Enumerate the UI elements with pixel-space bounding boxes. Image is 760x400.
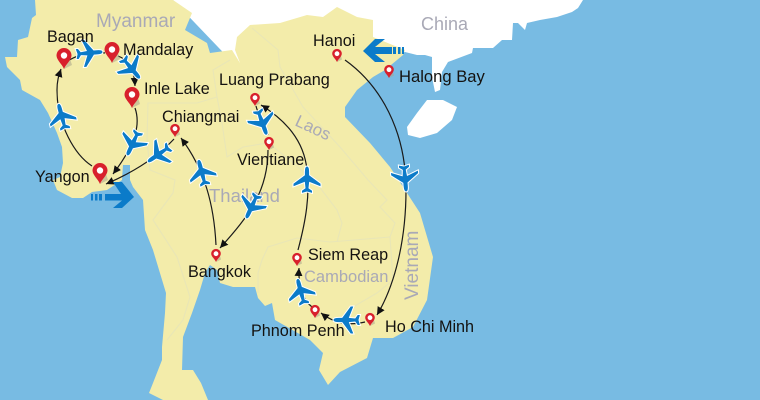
label: Mandalay: Mandalay: [123, 41, 194, 59]
label: Cambodian: Cambodian: [304, 268, 388, 286]
pin: Chiangmai: [170, 124, 180, 137]
route: Hanoi to Ho Chi Minh: [345, 60, 406, 315]
icon: plane Vientiane-Bangkok: [233, 188, 270, 225]
label: Inle Lake: Inle Lake: [144, 80, 210, 98]
pin: Siem Reap: [292, 253, 302, 266]
label: Ho Chi Minh: Ho Chi Minh: [385, 318, 474, 336]
pin: Yangon: [92, 163, 108, 184]
icon: plane Bangkok-Chiangmai: [185, 156, 219, 190]
route: Mandalay to Inle Lake: [118, 56, 135, 86]
map pins: [56, 42, 394, 326]
icon: plane Inle-Yangon: [114, 125, 151, 162]
icon: plane Chiangmai-Yangon: [140, 135, 178, 173]
icon: plane Yangon-Bagan: [45, 100, 79, 134]
icon: plane Vientiane-Luang Prabang: [244, 105, 280, 140]
label: Chiangmai: Chiangmai: [162, 108, 239, 126]
pin: Bagan: [56, 48, 72, 69]
pin: Ho Chi Minh: [365, 313, 375, 326]
Hainan island: [407, 100, 457, 138]
icon: plane Bagan-Mandalay: [74, 38, 104, 68]
label: Halong Bay: Halong Bay: [399, 67, 485, 86]
flight routes: [57, 52, 406, 324]
pin: Luang Prabang: [250, 93, 260, 106]
arrow: departure from Yangon: [91, 182, 134, 208]
route: Luang Prabang to Vientiane: [256, 106, 268, 135]
pin: Mandalay: [104, 42, 120, 63]
route: Phnom Penh to Siem Reap: [299, 268, 312, 307]
pin: Halong Bay: [384, 65, 394, 78]
mainland Southeast Asia: [5, 0, 433, 400]
icon: plane Siem Reap-Luang Prabang: [293, 166, 321, 194]
China landmass: [173, 0, 583, 92]
icon: plane Mandalay-Inle: [112, 49, 151, 88]
pin: Phnom Penh: [310, 305, 320, 318]
country labels: [96, 11, 469, 300]
label: Vietnam: Vietnam: [402, 231, 423, 300]
route: Bagan to Mandalay: [66, 52, 105, 62]
label: Yangon: Yangon: [35, 168, 90, 186]
pin: Bangkok: [211, 249, 221, 262]
route: Ho Chi Minh to Phnom Penh: [321, 313, 365, 324]
planes: [45, 38, 420, 334]
route: Bangkok to Chiangmai: [181, 138, 216, 245]
label: Laos: Laos: [292, 111, 334, 144]
route: Siem Reap to Luang Prabang: [261, 105, 308, 250]
icon: plane Hanoi-Ho Chi Minh: [390, 163, 420, 193]
label: Vientiane: Vientiane: [237, 151, 304, 169]
pin: Hanoi: [332, 49, 342, 62]
route: Vientiane to Bangkok: [220, 150, 268, 248]
label: Luang Prabang: Luang Prabang: [219, 71, 330, 89]
route: Inle Lake to Yangon: [113, 108, 137, 174]
arrow: arrival at Hanoi: [363, 39, 404, 62]
label: Myanmar: Myanmar: [96, 11, 176, 32]
label: Phnom Penh: Phnom Penh: [251, 322, 345, 340]
icon: plane Ho Chi Minh-Phnom Penh: [333, 306, 360, 334]
route: Yangon to Bagan: [57, 69, 92, 166]
label: Bagan: Bagan: [47, 28, 94, 46]
route: Chiangmai to Yangon: [106, 139, 174, 184]
icon: plane Phnom Penh-Siem Reap: [284, 275, 318, 309]
label: China: China: [421, 14, 469, 34]
label: Thailand: Thailand: [209, 185, 280, 206]
pin: Inle Lake: [124, 87, 140, 108]
label: Bangkok: Bangkok: [188, 263, 252, 281]
city labels: [35, 28, 485, 340]
label: Siem Reap: Siem Reap: [308, 246, 388, 264]
pin: Vientiane: [264, 137, 274, 150]
label: Hanoi: Hanoi: [313, 32, 355, 50]
